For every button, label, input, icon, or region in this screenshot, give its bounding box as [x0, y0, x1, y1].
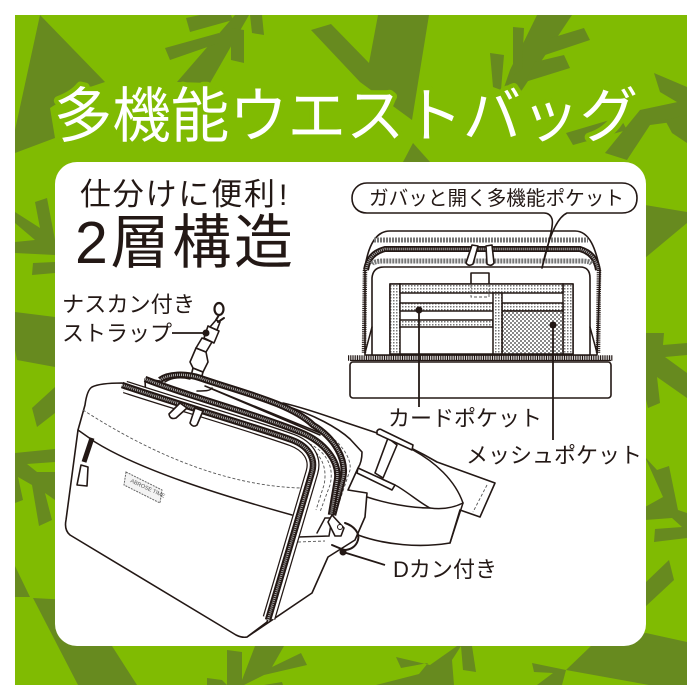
D-ring leader — [340, 548, 385, 565]
label: D-ring: Dカン付き — [393, 557, 497, 582]
inner compartment — [372, 267, 590, 355]
side stitching — [318, 428, 350, 506]
strap leader — [172, 330, 210, 336]
main heading: two-layer structure: 2層構造 — [75, 210, 293, 276]
label: snap hook strap — [62, 292, 195, 346]
middle zipper — [145, 379, 337, 515]
strap base arcs — [165, 378, 330, 437]
second zipper — [160, 375, 344, 515]
subheading: ! — [279, 179, 287, 212]
side zippers — [364, 270, 599, 353]
zipper pullers — [466, 245, 494, 265]
white content panel — [55, 162, 646, 646]
label: snap hook strap: ストラップ — [62, 321, 172, 346]
stitched lining band — [372, 261, 592, 264]
title: 多機能ウエストバッグ — [54, 83, 638, 150]
outer shell — [365, 231, 600, 355]
front zipper — [122, 385, 313, 620]
tab — [471, 273, 489, 285]
flap seam — [78, 430, 292, 515]
stitched band — [374, 238, 588, 242]
waist bag illustration — [66, 303, 495, 637]
open pocket illustration — [348, 231, 613, 398]
front panel — [66, 383, 313, 637]
label: snap hook strap: ナスカン付き — [62, 292, 195, 317]
bottom zipper — [348, 358, 613, 360]
lining diagonals — [365, 327, 597, 353]
card pocket leader — [416, 306, 422, 407]
snap hook strap — [188, 303, 224, 390]
mesh pocket leader — [550, 322, 556, 440]
card holder — [390, 284, 573, 354]
buckle — [357, 429, 413, 490]
pocket zipper and puller — [77, 438, 92, 486]
lower shell — [350, 362, 611, 398]
label: card pocket: カードポケット — [388, 406, 542, 431]
D-ring — [328, 515, 358, 550]
flap stitching — [83, 410, 300, 488]
lower side flap — [298, 518, 332, 537]
bubble text: ガバッと開く多機能ポケット — [369, 187, 624, 210]
belt — [283, 403, 495, 545]
back and side panels — [145, 375, 367, 637]
main zipper pullers — [169, 403, 203, 426]
brand patch — [124, 472, 166, 503]
label: mesh pocket: メッシュポケット — [466, 443, 642, 468]
subheading: 仕分けに便利 — [80, 177, 275, 212]
speech bubble callout — [352, 183, 637, 268]
brand patch: ABROSE TIME — [129, 478, 166, 500]
top zipper — [366, 249, 598, 270]
